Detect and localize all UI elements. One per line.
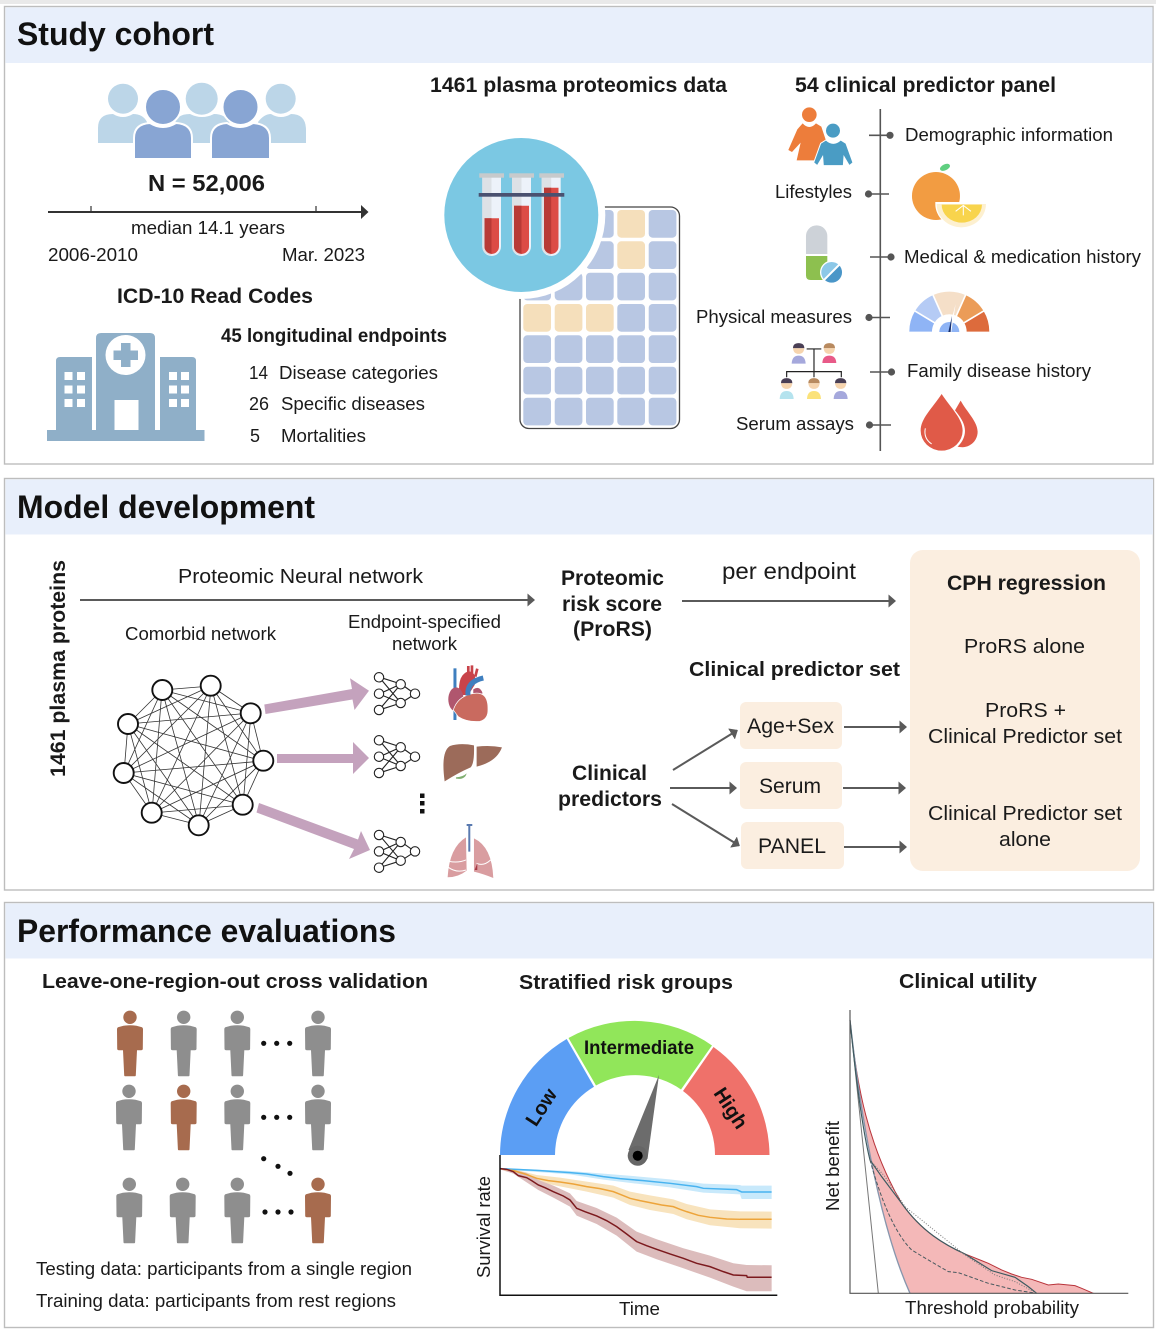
endpoint list: Mortalities [281, 425, 366, 446]
decision curve chart [850, 1010, 1128, 1293]
arrow: score to regression [682, 600, 895, 602]
icon: blood sample tubes [437, 131, 605, 299]
comorbid network graph [114, 676, 273, 835]
heading: longitudinal endpoints: 45 longitudinal endpoints [221, 326, 447, 347]
axis label: net benefit: Net benefit [822, 1121, 843, 1211]
proteomics data matrix [520, 207, 680, 428]
icon: fruit [912, 162, 987, 228]
box: age and sex: Age+Sex [747, 715, 834, 738]
axis label: threshold probability: Threshold probability [905, 1297, 1080, 1318]
endpoint list: Specific diseases [281, 393, 425, 414]
panel: CPH regression: CPH regression [947, 572, 1106, 595]
label: family disease history: Family disease history [907, 360, 1092, 381]
label: clinical predictors [558, 762, 662, 811]
endpoint list: 26 [249, 393, 269, 414]
small network: heart [374, 673, 420, 715]
heading: clinical utility: Clinical utility [899, 970, 1038, 993]
small network: liver [374, 736, 420, 778]
panel: study cohort [4, 6, 1153, 464]
sample size: N = 52,006 [148, 170, 265, 196]
icon: liver [443, 744, 502, 781]
label: comorbid network: Comorbid network [125, 623, 277, 644]
icon: lungs [448, 825, 493, 878]
icon: family tree [780, 343, 848, 399]
label: proteomic risk score: risk score [562, 593, 662, 616]
predictor timeline axis [865, 109, 895, 451]
label: endpoint-specified network: network [392, 633, 458, 654]
timeline label: median 14.1 years [131, 217, 285, 238]
heading: stratified risk groups: Stratified risk groups [519, 971, 733, 994]
arrows: sets to regression [843, 727, 906, 847]
label: lifestyles: Lifestyles [775, 181, 852, 202]
top edge strip [0, 0, 1156, 4]
risk gauge [500, 1021, 770, 1155]
risk gauge: High [709, 1084, 751, 1133]
icon: hospital [47, 333, 204, 441]
label: serum assays: Serum assays [736, 413, 854, 434]
arrows: predictors to sets [670, 730, 739, 846]
panel: CPH regression [910, 550, 1140, 871]
timeline start date: 2006-2010 [48, 244, 138, 265]
endpoint list: 14 [249, 362, 268, 383]
arrow: network to lung model [256, 803, 370, 859]
heading: ICD-10 read codes: ICD-10 Read Codes [117, 285, 313, 308]
box: serum: Serum [759, 775, 821, 798]
axis label: time: Time [619, 1298, 660, 1319]
panel: performance evaluations [4, 902, 1154, 1328]
heading: clinical predictor panel: 54 clinical predictor panel [795, 74, 1056, 97]
panel: CPH regression: ProRS + [985, 699, 1066, 722]
note: training data: Training data: participants from rest regions [36, 1290, 396, 1311]
box: panel: PANEL [758, 835, 826, 858]
label: endpoint-specified network [348, 611, 501, 654]
panel: CPH regression: ProRS alone [964, 635, 1085, 658]
panel: CPH regression: alone [999, 828, 1051, 851]
label: clinical predictors: predictors [558, 788, 662, 811]
label: demographic information: Demographic information [905, 124, 1113, 145]
arrow: network to heart model [264, 678, 369, 714]
ellipsis between networks [420, 794, 424, 814]
icon: group of people [98, 83, 306, 159]
arrow: network to liver model [277, 742, 369, 774]
label: proteomic risk score [561, 567, 664, 641]
gauge needle [628, 1075, 659, 1166]
icon: heart [448, 665, 488, 721]
note: testing data: Testing data: participants from a single region [36, 1258, 412, 1279]
risk gauge: Intermediate [584, 1038, 694, 1059]
header band: model development [6, 480, 1153, 534]
endpoint list: Disease categories [279, 362, 438, 383]
box: serum [740, 762, 842, 809]
axis label: survival rate: Survival rate [473, 1176, 494, 1278]
arrow: neural network to score [80, 599, 534, 601]
small network: lung [374, 830, 420, 872]
icon: blood drops [919, 393, 978, 452]
timeline end date: Mar. 2023 [282, 244, 365, 265]
box: panel [741, 822, 844, 869]
heading: performance evaluations: Performance evaluations [17, 913, 396, 949]
label: medical and medication history: Medical & medication history [904, 246, 1142, 267]
box: age and sex [740, 702, 842, 749]
heading: study cohort: Study cohort [17, 16, 214, 52]
panel: model development [4, 478, 1154, 890]
survival chart [500, 1155, 777, 1295]
header band: study cohort [6, 8, 1152, 63]
label: physical measures: Physical measures [696, 306, 852, 327]
heading: plasma proteomics: 1461 plasma proteomics data [430, 74, 727, 97]
label: proteomic neural network: Proteomic Neural network [178, 566, 424, 588]
heading: clinical predictor set: Clinical predictor set [689, 658, 900, 681]
follow-up timeline arrow [48, 205, 368, 219]
label: proteomic risk score: Proteomic [561, 567, 664, 590]
rotated label: plasma proteins: 1461 plasma proteins [47, 560, 70, 777]
header band: performance evaluations [6, 904, 1153, 958]
panel: CPH regression: Clinical Predictor set [928, 725, 1122, 748]
label: clinical predictors: Clinical [572, 762, 647, 785]
icon: physical measure gauge [914, 294, 985, 348]
icon: demographic people [788, 107, 853, 166]
heading: cross validation: Leave-one-region-out cross validation [42, 970, 428, 993]
people grid: leave-one-region-out [116, 1011, 331, 1243]
label: proteomic risk score: (ProRS) [573, 618, 652, 641]
endpoint list [249, 362, 438, 446]
label: endpoint-specified network: Endpoint-specified [348, 611, 501, 632]
panel: CPH regression: Clinical Predictor set [928, 802, 1122, 825]
heading: model development: Model development [17, 489, 315, 525]
risk gauge: Low [522, 1084, 562, 1130]
icon: medication [806, 225, 843, 284]
endpoint list: 5 [250, 425, 260, 446]
label: per endpoint: per endpoint [722, 558, 857, 584]
